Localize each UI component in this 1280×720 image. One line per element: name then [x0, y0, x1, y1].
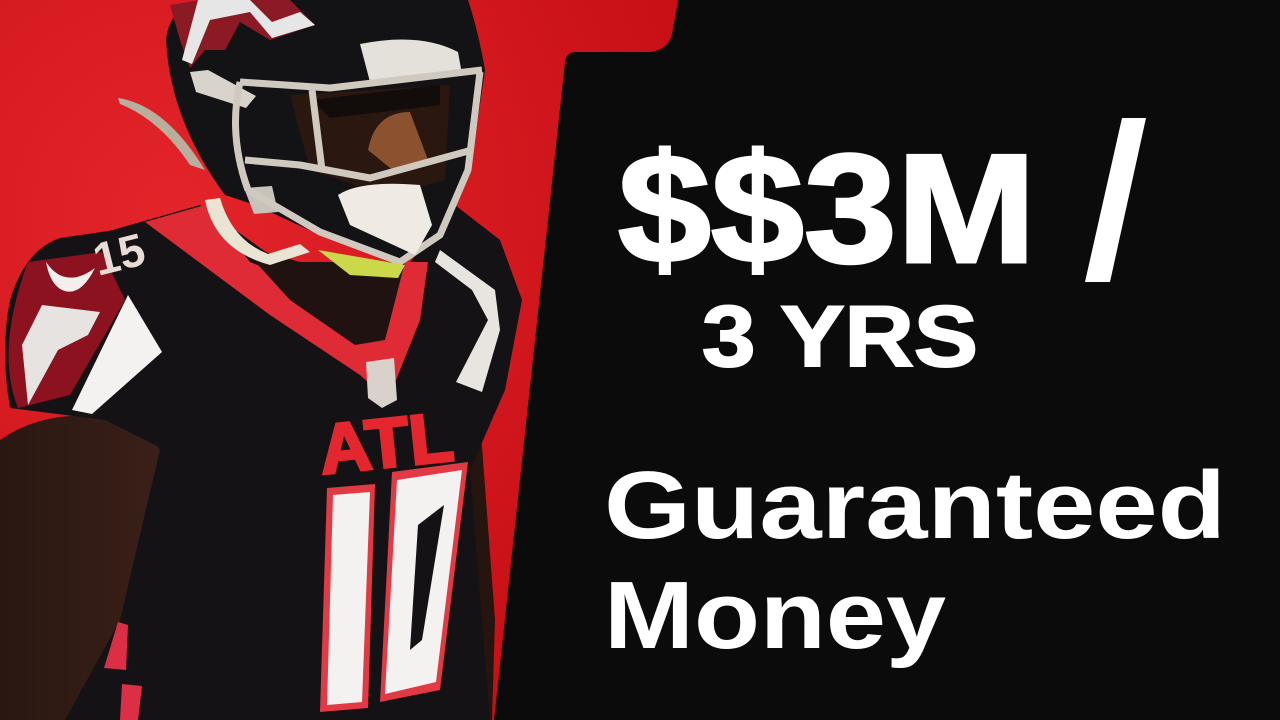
- left arm: [0, 416, 165, 720]
- red collar: [145, 205, 428, 400]
- mouth guard: [338, 184, 432, 255]
- chin strap: [318, 250, 405, 278]
- panel: black slanted background: [494, 0, 1280, 720]
- sleeve number: 15: [88, 223, 150, 286]
- jaw pad: [244, 186, 278, 214]
- jersey ATL letters: ATL: [315, 397, 457, 489]
- neck: [240, 245, 405, 345]
- shoulder pad strap: [435, 250, 500, 392]
- player illustration: [0, 0, 522, 720]
- jersey number 10: [320, 462, 468, 712]
- jersey shield badge: [366, 358, 397, 408]
- jersey body: [60, 205, 522, 720]
- sleeve logo: [22, 305, 100, 405]
- helmet shell: [166, 0, 485, 265]
- sleeve: [5, 225, 172, 450]
- sleeve red panel: [9, 252, 125, 408]
- subheading: 3 YRS: 3 YRS: [702, 289, 978, 385]
- jersey side stripes: [104, 622, 142, 720]
- headline: $$3M: $$3M: [618, 122, 1036, 295]
- neck strap: [205, 198, 310, 265]
- helmet: [118, 0, 485, 278]
- heading: Money: Money: [604, 562, 946, 669]
- heading: Guaranteed: Guaranteed: [604, 452, 1226, 559]
- facemask bars: [236, 70, 482, 262]
- slash: [1085, 118, 1146, 282]
- panel: red background: [0, 0, 690, 720]
- right arm: [400, 420, 495, 720]
- face: [290, 85, 450, 195]
- helmet rear tube: [118, 98, 205, 170]
- nike swoosh: [46, 262, 95, 292]
- helmet top plate: [360, 40, 462, 82]
- sleeve white panel: [72, 295, 162, 414]
- ear vent: [190, 70, 256, 108]
- falcon logo: [170, 0, 315, 68]
